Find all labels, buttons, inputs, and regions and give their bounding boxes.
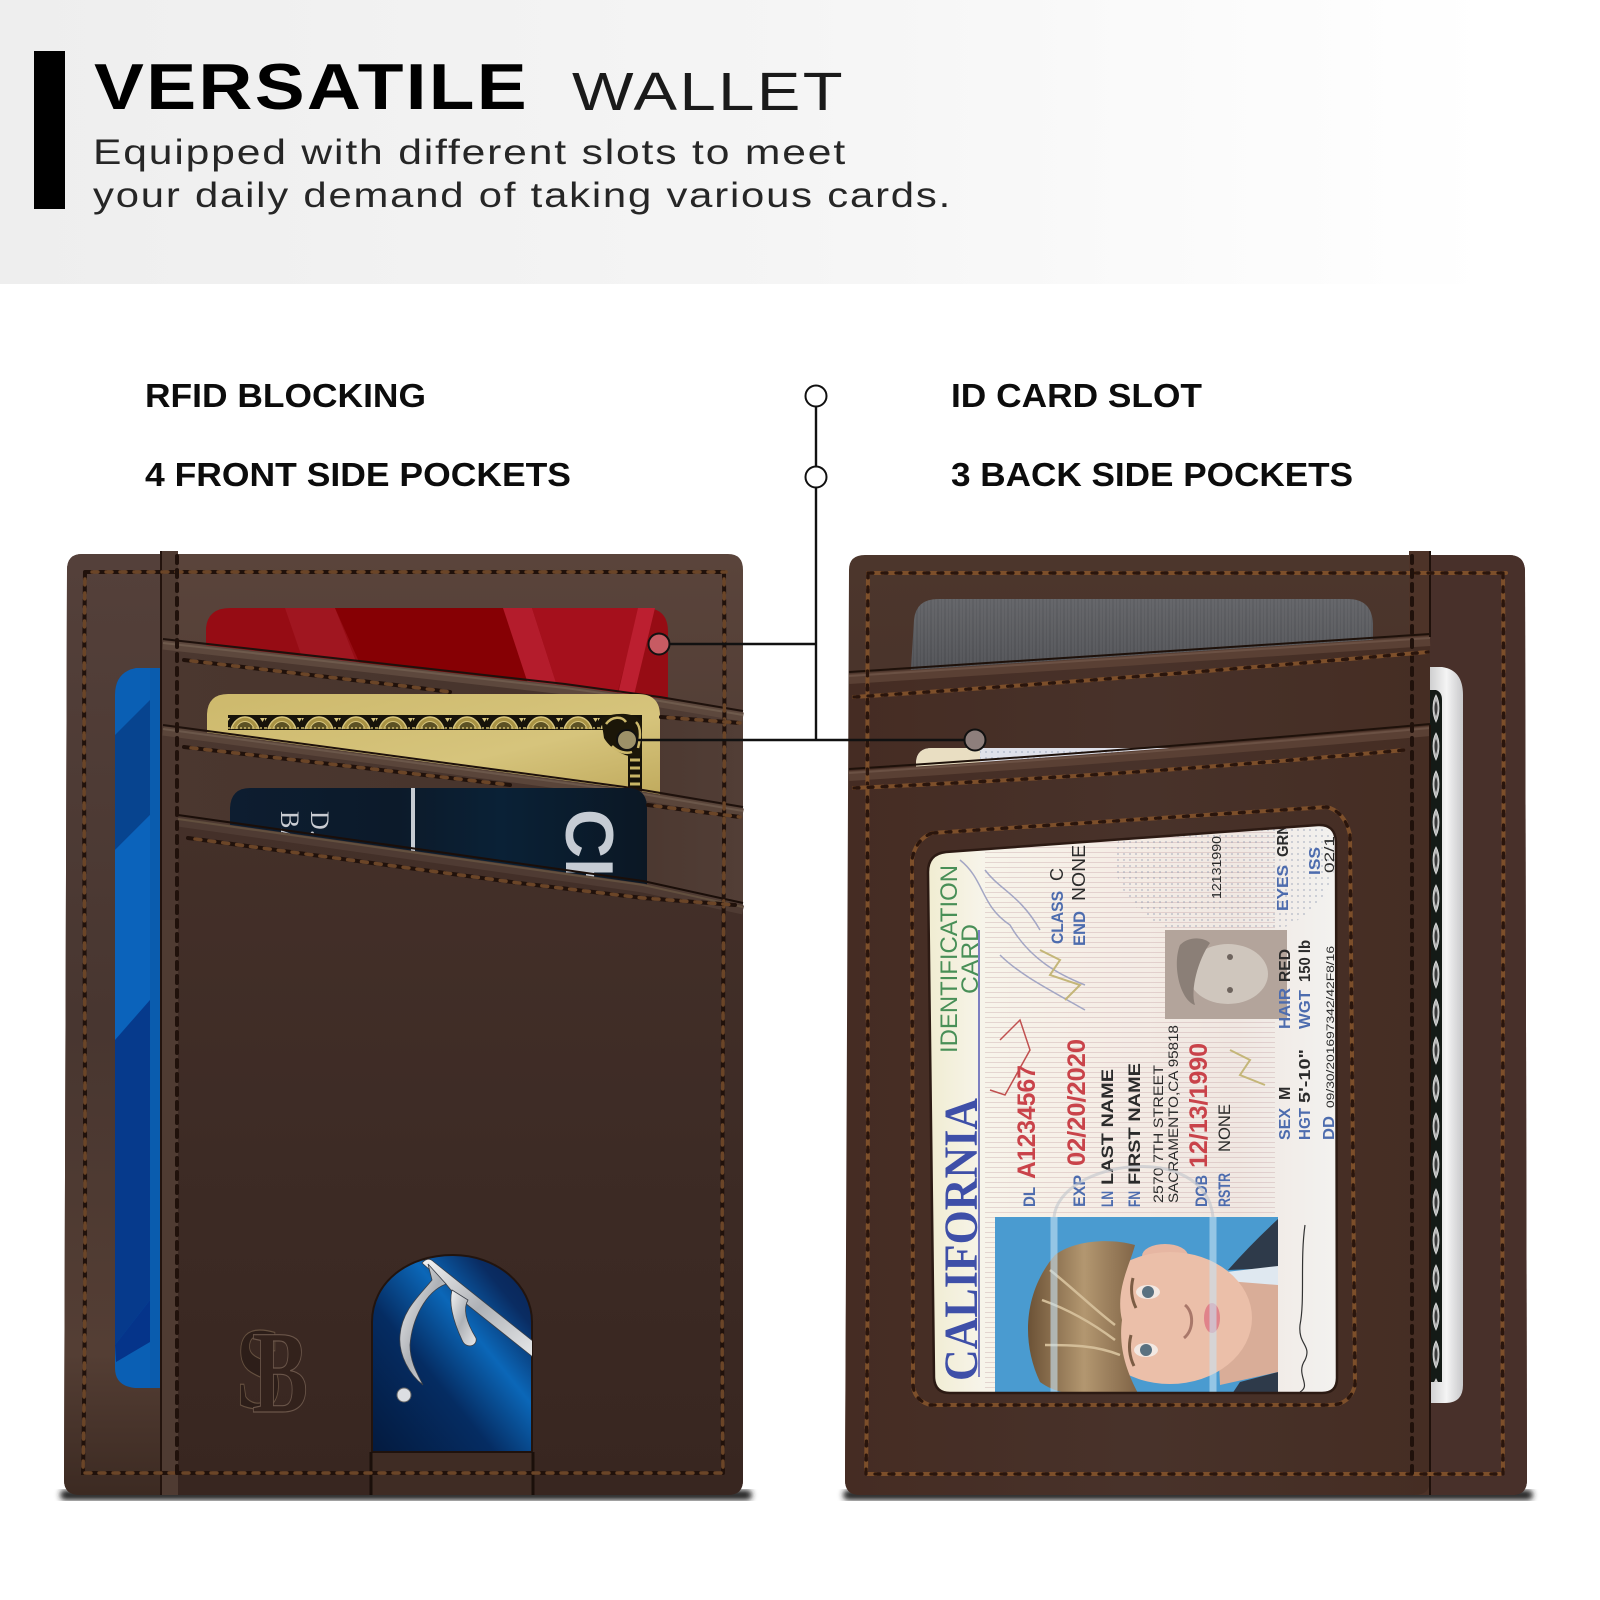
right strip [1430,555,1527,1495]
ID card peeking [916,748,1205,790]
license fields: FN [1125,1191,1144,1207]
license fields: DD [1321,1116,1338,1140]
marker: front side pockets [806,466,826,488]
license fields: 2570 7TH STREET [1150,1064,1166,1203]
silver side card [1430,667,1463,1403]
license fields: 5'-10" [1297,1049,1314,1103]
feature labels left [145,377,571,493]
ID window [929,826,1336,1392]
license fields: LN [1098,1191,1117,1207]
marker: rfid blocking [806,386,826,406]
left wallet: front side [64,551,743,1495]
pocket 1 [161,639,743,900]
card corner ornament [601,714,642,757]
license fields [1013,824,1338,1207]
right wallet: back side [845,551,1527,1495]
license fields: GRN [1275,824,1292,857]
license fields: LAST NAME [1098,1069,1117,1185]
dark card: D. [305,811,334,836]
signature [1300,1225,1307,1392]
subtitle [93,133,952,215]
blue card [115,668,162,1388]
window rim [928,825,1337,1393]
hair [1028,1241,1140,1397]
license fields: EYES [1275,865,1292,911]
dark card: CH [551,809,627,907]
license fields: C [1047,868,1067,881]
neck [1215,1280,1278,1385]
seam band [1409,551,1430,1495]
license fields: NONE [1069,845,1089,901]
brows [1130,1278,1136,1366]
state title: CALIFORNIA [935,1098,988,1381]
leather body [845,555,1527,1495]
seam band [161,551,178,1495]
ear [1142,1244,1188,1256]
license fields: RED [1277,949,1294,982]
license fields: SEX [1277,1108,1294,1140]
license fields: 12/13/1990 [1185,1043,1213,1168]
license fields: ISS [1307,847,1324,875]
seam edge [160,551,162,1495]
gold card [207,694,660,800]
feature labels left: RFID BLOCKING [145,377,426,414]
subtitle: Equipped with different slots to meet [93,133,847,172]
license fields: END [1070,911,1089,946]
identification card text: CARD [957,924,984,994]
dark card: BA [275,811,304,847]
license fields: HGT [1297,1108,1314,1140]
license fields: 09/30/201697342/42F8/16 [1325,946,1337,1108]
ghost portrait [1165,930,1287,1019]
pocket B [845,724,1430,1495]
stitching [83,556,740,1474]
collar [1226,1266,1278,1285]
header band [0,0,1600,284]
pocket 2 [161,725,743,920]
title: WALLET [572,62,845,122]
feature labels right: 3 BACK SIDE POCKETS [951,456,1353,493]
stitching [854,556,1506,1474]
SB monogram: S [236,1303,282,1434]
accent bar [34,51,65,209]
license fields: FIRST NAME [1125,1063,1144,1185]
dark card [230,788,647,907]
ID card background [929,826,1336,1392]
license fields: 02/1 [1321,836,1337,873]
feature labels right: ID CARD SLOT [951,377,1202,414]
feature labels left: 4 FRONT SIDE POCKETS [145,456,571,493]
hologram glare [1054,1166,1213,1395]
wallet ground shadows [60,1490,1533,1500]
license fields: NONE [1215,1104,1234,1152]
marker: red card pin [648,634,670,654]
silver emblem [400,1259,534,1385]
license fields: RSTR [1215,1173,1234,1207]
nose [1184,1305,1192,1338]
license fields: HAIR [1277,988,1294,1029]
license fields: CLASS [1048,891,1067,944]
SB monogram: B [252,1307,308,1438]
lips [1204,1303,1220,1333]
connector lines [637,407,964,740]
license fields: 150 lb [1297,940,1314,982]
feature labels right [951,377,1353,493]
pocket A [849,634,1430,800]
marker: back pocket pin [964,730,986,750]
license fields: 02/20/2020 [1063,1039,1091,1166]
license fields: DOB [1192,1175,1211,1207]
license fields: DL [1020,1187,1039,1207]
front main pocket [178,815,743,1495]
license fields: SACRAMENTO,CA 95818 [1165,1025,1181,1203]
license fields: EXP [1070,1175,1089,1207]
title rule [978,930,980,1377]
finger slot [372,1255,534,1452]
main photo [995,1217,1278,1397]
subtitle: your daily demand of taking various cards. [93,176,952,215]
license fields: M [1277,1087,1294,1100]
left strip [64,554,162,1495]
pull tab [371,1452,533,1495]
title: VERSATILE [94,50,529,123]
license fields: 12131990 [1209,836,1224,899]
identification card text: IDENTIFICATION [936,865,963,1053]
marker: gold card pin [617,730,637,750]
face [1120,1252,1252,1384]
license fields: A1234567 [1013,1065,1041,1179]
leather body [64,554,743,1495]
license fields: WGT [1297,990,1314,1029]
title [94,50,845,123]
identification card text [940,867,978,1051]
header background [0,0,1600,284]
red card [206,608,668,740]
suit [1228,1219,1278,1270]
metal card [909,599,1373,700]
eyes [1136,1285,1160,1299]
seam edge [1429,551,1431,1495]
